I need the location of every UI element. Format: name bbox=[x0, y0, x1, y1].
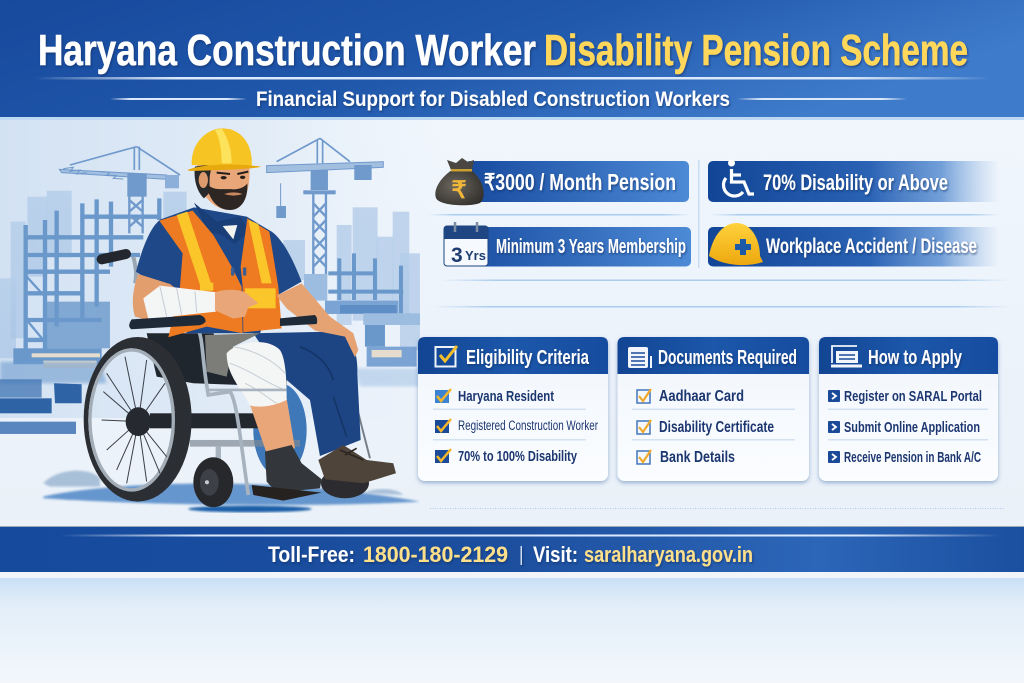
apply steps: Register on SARAL Portal bbox=[844, 388, 982, 405]
apply steps bbox=[828, 388, 988, 466]
safety vest bbox=[159, 211, 282, 337]
pill: membership: Minimum 3 Years Membership bbox=[496, 236, 686, 258]
title bbox=[38, 26, 968, 75]
card: how to apply: How to Apply bbox=[868, 347, 963, 369]
head bbox=[195, 163, 250, 210]
eligibility items: Haryana Resident bbox=[458, 388, 554, 405]
card: how to apply bbox=[819, 337, 998, 481]
document items: Disability Certificate bbox=[659, 419, 774, 436]
icon: check box bbox=[436, 346, 457, 366]
caster wheel bbox=[193, 457, 233, 507]
eligibility items: Registered Construction Worker bbox=[458, 418, 598, 433]
pill: workplace accident bbox=[708, 223, 1000, 266]
document items: Bank Details bbox=[660, 449, 735, 466]
pill: pension amount bbox=[435, 158, 689, 205]
pill: membership bbox=[444, 222, 691, 267]
legs and pants bbox=[205, 332, 361, 456]
icon: wheelchair bbox=[723, 160, 754, 196]
right crane bbox=[267, 138, 383, 277]
worker in wheelchair bbox=[43, 128, 420, 512]
card: documents required: Documents Required bbox=[658, 347, 797, 369]
ground shadow bbox=[43, 471, 420, 512]
eligibility items bbox=[433, 388, 598, 465]
pill: disability percent: 70% Disability or Above bbox=[763, 170, 948, 195]
hard hat bbox=[187, 128, 261, 171]
card: documents required bbox=[618, 337, 809, 481]
push handle bbox=[102, 254, 126, 259]
armrests bbox=[129, 315, 317, 329]
card: eligibility criteria: Eligibility Criteria bbox=[466, 347, 590, 369]
chair seat bbox=[133, 257, 300, 447]
shirt bbox=[136, 203, 302, 333]
icon: laptop bbox=[831, 346, 862, 368]
contact text: Toll-Free: bbox=[268, 542, 355, 567]
boots bbox=[252, 445, 396, 501]
contact text: saralharyana.gov.in bbox=[584, 542, 753, 567]
document items: Aadhaar Card bbox=[659, 388, 744, 405]
main background bbox=[0, 118, 1024, 528]
main wheel bbox=[84, 337, 192, 502]
document items bbox=[632, 388, 795, 466]
knee bandage bbox=[227, 342, 287, 407]
icon: calendar: Yrs bbox=[465, 248, 486, 263]
card: eligibility criteria bbox=[418, 337, 608, 481]
arms bbox=[133, 274, 358, 357]
title: Haryana Construction Worker bbox=[38, 26, 536, 75]
contact text: Visit: bbox=[533, 542, 578, 567]
icon: document bbox=[628, 347, 652, 368]
chair frame bbox=[197, 328, 287, 495]
icon: helmet with cross bbox=[709, 223, 763, 265]
subtitle: Financial Support for Disabled Construction Workers bbox=[256, 88, 730, 111]
lower leg bbox=[250, 398, 295, 453]
ground wash bbox=[0, 362, 107, 383]
footer band bbox=[0, 526, 1024, 578]
pill: disability percent bbox=[708, 160, 1000, 202]
contact text bbox=[268, 542, 753, 567]
far wheel bbox=[253, 383, 370, 498]
benefit rows bbox=[428, 158, 1012, 308]
icon: calendar: 3 bbox=[451, 244, 463, 267]
left crane bbox=[59, 147, 180, 233]
rubble blocks bbox=[0, 379, 82, 434]
header banner bbox=[0, 0, 1024, 120]
contact text: 1800-180-2129 bbox=[363, 542, 508, 567]
construction site backdrop bbox=[0, 138, 420, 434]
divider lines bbox=[428, 160, 1012, 308]
left scaffold bbox=[26, 198, 160, 350]
skyline buildings bbox=[0, 191, 420, 358]
icon: money bag bbox=[435, 158, 484, 205]
eligibility items: 70% to 100% Disability bbox=[458, 448, 577, 465]
icon: calendar bbox=[444, 222, 488, 267]
right scaffold bbox=[328, 253, 403, 313]
pill: pension amount: ₹3000 / Month Pension bbox=[484, 169, 676, 195]
icon: money bag: ₹ bbox=[451, 177, 467, 204]
bottom pale area bbox=[0, 578, 1024, 683]
